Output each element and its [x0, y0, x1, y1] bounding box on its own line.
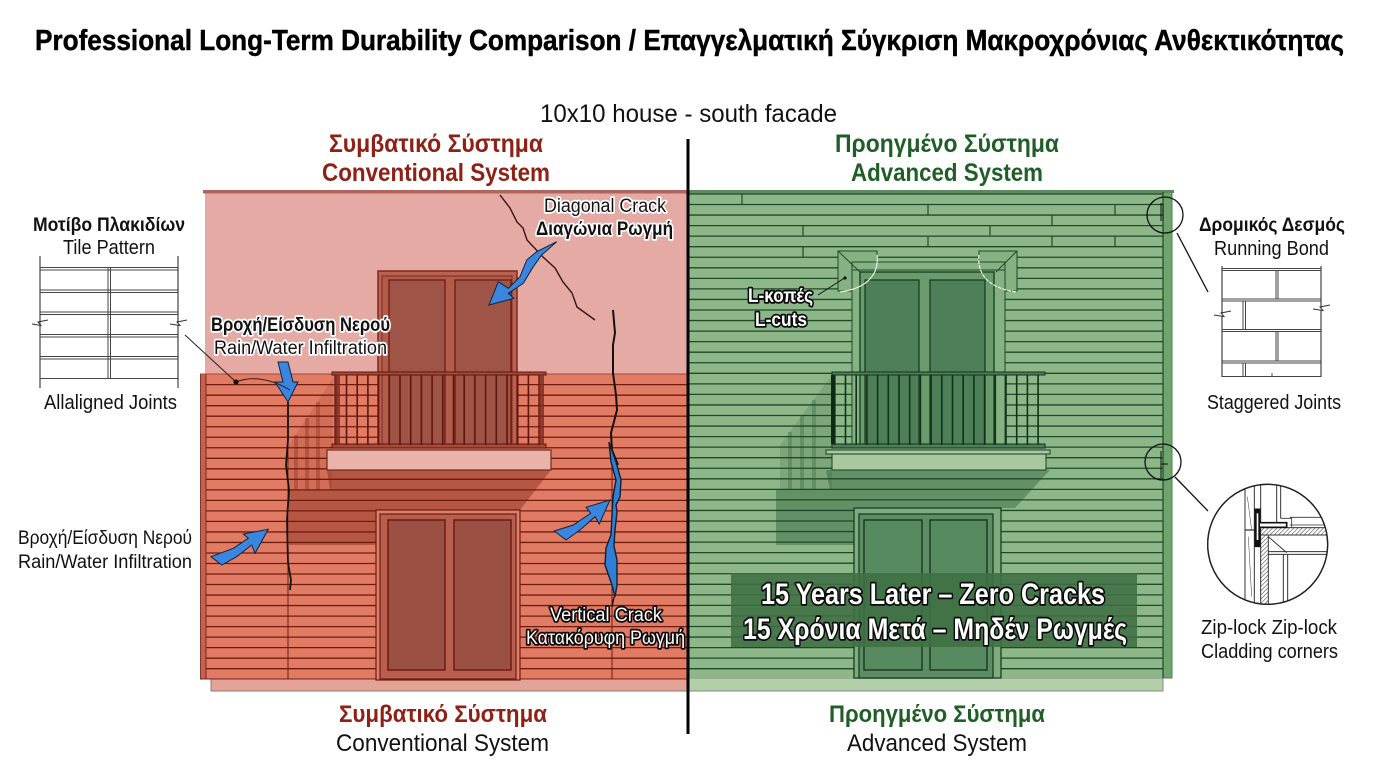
- label: diagonal crack: Diagonal Crack: [544, 196, 666, 217]
- caption: Staggered Joints: [1207, 392, 1341, 414]
- staggered board joints: [742, 194, 1115, 257]
- label: rain water infiltration left: Rain/Water Infiltration: [18, 552, 192, 573]
- caption: Cladding corners: [1201, 641, 1338, 663]
- heading: advanced system: Προηγμένο Σύστημα: [835, 130, 1060, 158]
- panel: advanced facade: [688, 190, 1174, 691]
- panel: conventional facade: [200, 190, 688, 691]
- label: rain water infiltration on wall: Βροχή/Είσδυση Νερού: [211, 315, 390, 336]
- aligned tile drawing: [32, 256, 187, 388]
- detail circle and leader: [1147, 197, 1208, 292]
- balcony slab: [826, 450, 1050, 470]
- running bond callout: [1147, 197, 1345, 414]
- upper door: [860, 272, 994, 445]
- staggered brick drawing: [1214, 266, 1330, 377]
- label: rain water infiltration left: [18, 528, 192, 573]
- left crack: [286, 402, 291, 590]
- lower door: [854, 508, 1001, 678]
- heading: Running Bond: [1214, 238, 1329, 260]
- bottom label: advanced system: Advanced System: [847, 730, 1027, 757]
- caption: [1201, 617, 1338, 663]
- balcony shadow: [776, 375, 1050, 545]
- bottom label: conventional system: [336, 701, 549, 757]
- plinth: [688, 678, 1163, 691]
- small detail circle and leader: [1145, 444, 1208, 511]
- heading: conventional system: Συμβατικό Σύστημα: [329, 130, 544, 158]
- banner: 15 years later: [731, 573, 1137, 647]
- vertical crack: [605, 310, 621, 607]
- arrow: rain lower left: [211, 529, 268, 565]
- heading: conventional system: [322, 130, 550, 187]
- arrow: vertical crack: [554, 500, 610, 540]
- upper plaster wall: [205, 192, 688, 375]
- leader: [185, 335, 290, 390]
- lower door: [376, 510, 520, 680]
- tile pattern callout: [32, 215, 290, 414]
- plinth: [211, 679, 688, 691]
- caption: Zip-lock Zip-lock: [1201, 617, 1338, 639]
- banner: 15 years later: 15 Χρόνια Μετά – Μηδέν Ρωγμές: [743, 613, 1127, 646]
- heading: [33, 215, 185, 259]
- label: L-cuts: L-cuts: [755, 310, 807, 331]
- heading: [1199, 215, 1345, 260]
- window surround with L-cuts: [838, 251, 1017, 445]
- arrow: rain down: [275, 362, 298, 402]
- bottom label: conventional system: Συμβατικό Σύστημα: [339, 701, 547, 728]
- balcony railing: [332, 372, 546, 448]
- cornice: [203, 190, 688, 194]
- label: L-cuts: [748, 276, 847, 331]
- arrow: diagonal crack: [489, 242, 557, 305]
- banner: 15 years later: 15 Years Later – Zero Cracks: [761, 578, 1105, 611]
- heading: Δρομικός Δεσμός: [1199, 215, 1345, 236]
- heading: Tile Pattern: [63, 237, 155, 259]
- heading: advanced system: [835, 130, 1060, 187]
- siding wall: [688, 190, 1174, 678]
- label: rain water infiltration left: Βροχή/Είσδυση Νερού: [18, 528, 192, 549]
- zip-lock section detail: [1208, 480, 1331, 608]
- heading: advanced system: Advanced System: [851, 159, 1043, 187]
- bottom label: conventional system: Conventional System: [336, 730, 549, 757]
- label: rain water infiltration on wall: [211, 315, 390, 359]
- label: vertical crack: Vertical Crack: [550, 605, 662, 626]
- balcony shadow: [289, 378, 551, 545]
- bottom label: advanced system: [829, 701, 1045, 757]
- bottom label: advanced system: Προηγμένο Σύστημα: [829, 701, 1045, 728]
- balcony railing: [831, 372, 1045, 448]
- caption: Allaligned Joints: [44, 392, 177, 414]
- balcony slab: [327, 450, 551, 470]
- label: diagonal crack: [536, 196, 673, 240]
- zip-lock callout: [1145, 444, 1338, 663]
- label: vertical crack: Κατακόρυφη Ρωγμή: [526, 628, 685, 649]
- label: diagonal crack: Διαγώνια Ρωγμή: [536, 219, 673, 240]
- upper door: [378, 271, 517, 445]
- heading: conventional system: Conventional System: [322, 159, 550, 187]
- subtitle: 10x10 house - south facade: [540, 100, 837, 128]
- label: rain water infiltration on wall: Rain/Water Infiltration: [214, 338, 387, 359]
- label: L-cuts: L-κοπές: [748, 286, 813, 307]
- diagonal crack: [500, 195, 595, 320]
- center divider: [686, 139, 690, 734]
- lower siding wall: [200, 374, 688, 679]
- label: vertical crack: [526, 605, 685, 649]
- heading: Μοτίβο Πλακιδίων: [33, 215, 185, 236]
- L-cut marks: [840, 255, 1017, 292]
